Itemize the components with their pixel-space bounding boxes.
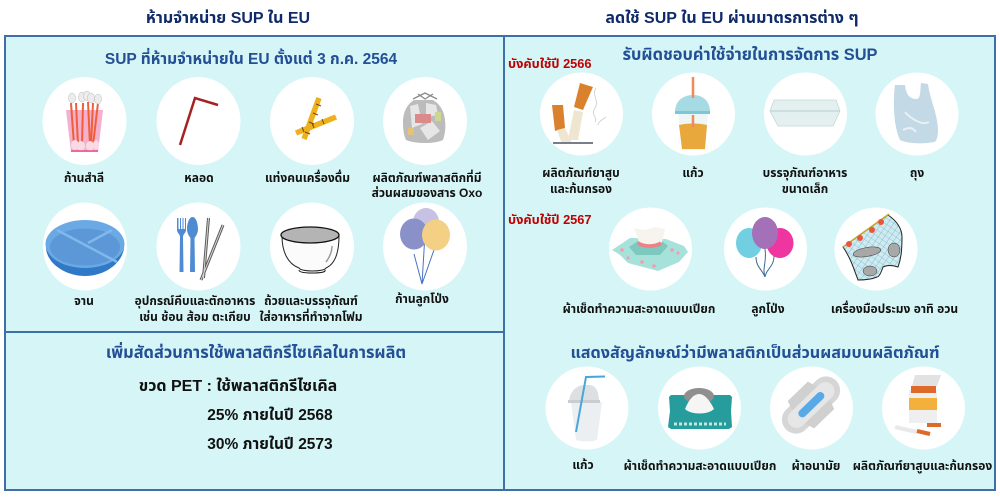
item: food tray bbox=[764, 72, 847, 156]
item: wipes pack teal bbox=[658, 366, 741, 450]
label: หลอด bbox=[184, 171, 214, 185]
label: ผลิตภัณฑ์ยาสูบ bbox=[542, 166, 620, 181]
panel: banned SUP bbox=[5, 36, 504, 332]
label: ลูกโป่ง bbox=[751, 302, 785, 317]
label: แก้ว bbox=[682, 166, 704, 180]
heading: banned SUP: SUP ที่ห้ามจำหน่ายใน EU ตั้งแต่ 3 ก.ค. 2564 bbox=[105, 47, 398, 68]
title: left column: ห้ามจำหน่าย SUP ใน EU bbox=[146, 9, 310, 27]
text: 30 percent: 30% ภายในปี 2573 bbox=[207, 436, 333, 453]
item: wet wipes pack bbox=[609, 208, 692, 290]
label line 2: ส่วนผสมของสาร Oxo bbox=[372, 186, 482, 200]
label: ผ้าอนามัย bbox=[792, 459, 840, 473]
item: clear cup bbox=[546, 366, 628, 450]
heading: labelling: แสดงสัญลักษณ์ว่ามีพลาสติกเป็นส่วนผสมบนผลิตภัณฑ์ bbox=[570, 344, 940, 362]
note: 2566: บังคับใช้ปี 2566 bbox=[508, 56, 592, 71]
item: cigarette butts bbox=[540, 72, 623, 156]
text: PET bottles: ขวด PET : ใช้พลาสติกรีไซเคิล bbox=[139, 377, 337, 395]
label: ผ้าเช็ดทำความสะอาดแบบเปียก bbox=[624, 459, 776, 473]
label line 2: และก้นกรอง bbox=[550, 182, 612, 196]
item: plastic bag bbox=[876, 72, 958, 156]
label line 2: ขนาดเล็ก bbox=[782, 182, 828, 196]
item: stirrers bbox=[270, 77, 354, 165]
item: cotton buds bbox=[42, 77, 126, 165]
label line 2: ใส่อาหารที่ทำจากโฟม bbox=[260, 308, 362, 324]
label: อุปกรณ์คีบและตักอาหาร bbox=[135, 294, 255, 308]
label: ผ้าเช็ดทำความสะอาดแบบเปียก bbox=[563, 302, 715, 316]
label: ก้านลูกโป่ง bbox=[395, 292, 449, 307]
item: balloons bbox=[724, 208, 807, 290]
item: cigarette pack bbox=[882, 366, 965, 450]
label line 2: เช่น ช้อน ส้อม ตะเกียบ bbox=[139, 310, 251, 324]
label: แก้ว bbox=[572, 458, 594, 472]
item: straw bbox=[156, 77, 240, 165]
label: ถ้วยและบรรจุภัณฑ์ bbox=[264, 294, 358, 308]
item: foam bowl bbox=[270, 202, 354, 290]
label: ผลิตภัณฑ์พลาสติกที่มี bbox=[372, 169, 482, 185]
note: 2567: บังคับใช้ปี 2567 bbox=[508, 212, 592, 227]
item: oxo bag bbox=[383, 77, 467, 165]
item: balloon sticks bbox=[383, 202, 467, 290]
label: บรรจุภัณฑ์อาหาร bbox=[763, 166, 847, 180]
heading: recycled plastic: เพิ่มสัดส่วนการใช้พลาสติกรีไซเคิลในการผลิต bbox=[106, 342, 406, 362]
item: fishing net bbox=[834, 208, 918, 290]
label: จาน bbox=[74, 294, 94, 308]
text: 25 percent: 25% ภายในปี 2568 bbox=[207, 407, 333, 424]
label: แท่งคนเครื่องดื่ม bbox=[265, 169, 350, 185]
panel: right column bbox=[504, 36, 995, 490]
title: right column: ลดใช้ SUP ใน EU ผ่านมาตรการต่าง ๆ bbox=[605, 9, 859, 27]
item: sanitary pad bbox=[770, 366, 853, 450]
item: plate bbox=[43, 202, 127, 290]
label: ก้านสำลี bbox=[64, 171, 104, 185]
label: เครื่องมือประมง อาทิ อวน bbox=[831, 300, 958, 316]
label: ถุง bbox=[910, 166, 924, 180]
heading: EPR: รับผิดชอบค่าใช้จ่ายในการจัดการ SUP bbox=[623, 46, 878, 64]
item: cutlery bbox=[156, 202, 240, 290]
item: cup bbox=[652, 72, 735, 156]
panel: recycled plastic bbox=[5, 332, 504, 490]
label: ผลิตภัณฑ์ยาสูบและก้นกรอง bbox=[853, 459, 992, 474]
